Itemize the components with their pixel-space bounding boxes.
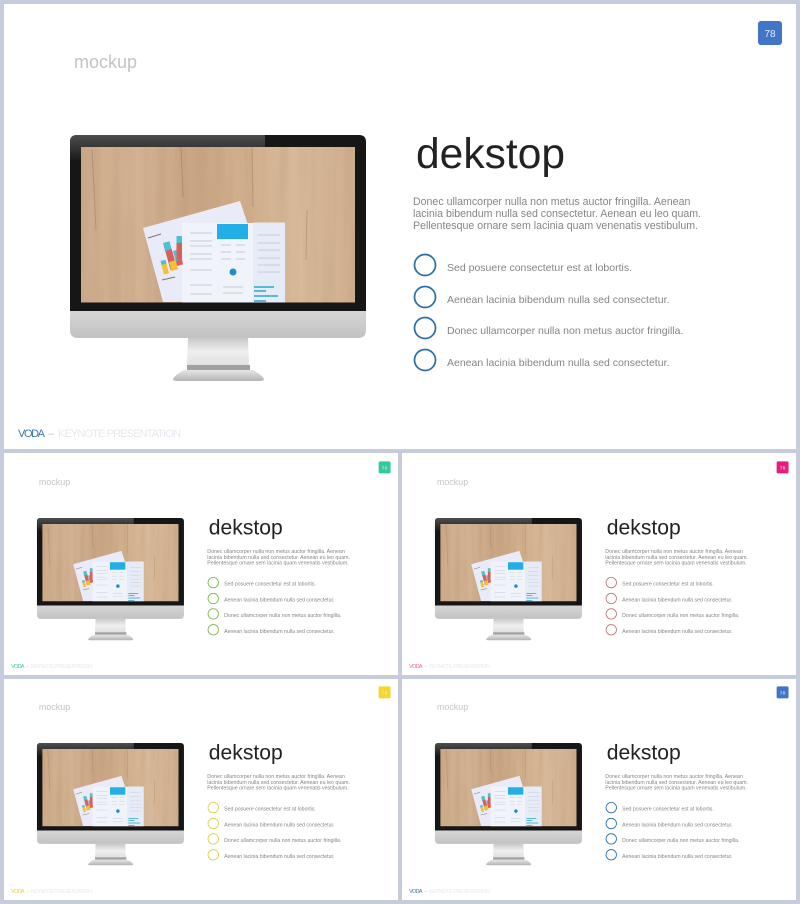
footer: – — [26, 664, 30, 670]
badge: page number — [758, 21, 782, 45]
footer: – — [48, 428, 55, 440]
illustration: desktop monitor — [435, 518, 582, 640]
list: bullet points: Aenean lacinia bibendum nulla sed consectetur. — [447, 357, 669, 369]
panel: small slide, yellow — [4, 679, 398, 900]
badge: page number: 78 — [382, 465, 388, 471]
title: dekstop: dekstop — [209, 516, 283, 539]
illustration: desktop monitor — [37, 518, 184, 640]
text block: description: Pellentesque ornare sem lacinia quam venenatis vestibulum. — [413, 220, 698, 232]
badge: page number — [777, 686, 789, 698]
footer: VODA — [409, 889, 423, 895]
illustration: desktop monitor — [70, 135, 366, 381]
list: bullet points: Sed posuere consectetur est at lobortis. — [622, 807, 714, 813]
text block: description: lacinia bibendum nulla sed consectetur. Aenean eu leo quam. — [413, 208, 701, 220]
list: bullet points — [606, 802, 739, 860]
illustration: desktop monitor — [37, 743, 184, 865]
footer: VODA — [11, 889, 25, 895]
text block: description: lacinia bibendum nulla sed consectetur. Aenean eu leo quam. — [605, 780, 748, 786]
list: bullet points: Aenean lacinia bibendum nulla sed consectetur. — [224, 822, 334, 828]
list: bullet points: Aenean lacinia bibendum nulla sed consectetur. — [622, 597, 732, 603]
list: bullet points: Aenean lacinia bibendum nulla sed consectetur. — [622, 629, 732, 635]
panel: small slide, pink — [402, 453, 796, 675]
list: bullet points: Donec ullamcorper nulla non metus auctor fringilla. — [224, 613, 341, 619]
panel: small slide, blue — [402, 679, 796, 900]
panel: main slide, blue — [4, 4, 796, 449]
text block: description: Pellentesque ornare sem lacinia quam venenatis vestibulum. — [605, 561, 747, 567]
footer: – — [424, 889, 428, 895]
list: bullet points: Sed posuere consectetur est at lobortis. — [224, 582, 316, 588]
footer: KEYNOTE PRESENTATION — [31, 889, 92, 895]
title: dekstop: dekstop — [607, 516, 681, 539]
list: bullet points — [606, 577, 739, 635]
badge: page number — [379, 686, 391, 698]
text block: description: Pellentesque ornare sem lacinia quam venenatis vestibulum. — [207, 786, 349, 792]
list: bullet points — [414, 254, 683, 370]
title: dekstop: dekstop — [416, 131, 565, 178]
text block: description: Pellentesque ornare sem lacinia quam venenatis vestibulum. — [605, 786, 747, 792]
list: bullet points: Aenean lacinia bibendum nulla sed consectetur. — [224, 629, 334, 635]
badge: page number: 78 — [382, 690, 388, 696]
list: bullet points: Donec ullamcorper nulla non metus auctor fringilla. — [622, 613, 739, 619]
list: bullet points: Sed posuere consectetur est at lobortis. — [622, 582, 714, 588]
list: bullet points: Aenean lacinia bibendum nulla sed consectetur. — [224, 854, 334, 860]
text block: description: Donec ullamcorper nulla non metus auctor fringilla. Aenean — [207, 774, 345, 780]
text block: description: Donec ullamcorper nulla non metus auctor fringilla. Aenean — [413, 196, 690, 208]
footer: KEYNOTE PRESENTATION — [429, 889, 490, 895]
list: bullet points: Sed posuere consectetur est at lobortis. — [224, 807, 316, 813]
text block: description: Pellentesque ornare sem lacinia quam venenatis vestibulum. — [207, 561, 349, 567]
title: dekstop: dekstop — [607, 741, 681, 764]
badge: page number — [777, 461, 789, 473]
list: bullet points: Aenean lacinia bibendum nulla sed consectetur. — [622, 822, 732, 828]
list: bullet points: Aenean lacinia bibendum nulla sed consectetur. — [447, 294, 669, 306]
footer: VODA — [409, 664, 423, 670]
heading: mockup: mockup — [39, 477, 70, 487]
badge: page number: 78 — [780, 465, 786, 471]
list: bullet points — [208, 802, 341, 860]
badge: page number — [379, 461, 391, 473]
list: bullet points: Sed posuere consectetur est at lobortis. — [447, 262, 632, 274]
illustration: desktop monitor — [435, 743, 582, 865]
text block: description: lacinia bibendum nulla sed consectetur. Aenean eu leo quam. — [207, 780, 350, 786]
text block: description: Donec ullamcorper nulla non metus auctor fringilla. Aenean — [605, 774, 743, 780]
footer: KEYNOTE PRESENTATION — [429, 664, 490, 670]
badge: page number: 78 — [780, 690, 786, 696]
footer: – — [424, 664, 428, 670]
list: bullet points: Donec ullamcorper nulla non metus auctor fringilla. — [622, 838, 739, 844]
footer: VODA — [11, 664, 25, 670]
text block: description: Donec ullamcorper nulla non metus auctor fringilla. Aenean — [207, 549, 345, 555]
text block: description: Donec ullamcorper nulla non metus auctor fringilla. Aenean — [605, 549, 743, 555]
footer: KEYNOTE PRESENTATION — [58, 428, 181, 440]
footer: – — [26, 889, 30, 895]
list: bullet points — [208, 577, 341, 635]
list: bullet points: Aenean lacinia bibendum nulla sed consectetur. — [622, 854, 732, 860]
panel: small slide, green — [4, 453, 398, 675]
heading: mockup: mockup — [39, 702, 70, 712]
heading: mockup: mockup — [437, 702, 468, 712]
heading: mockup: mockup — [74, 52, 137, 72]
heading: mockup: mockup — [437, 477, 468, 487]
footer: VODA — [18, 428, 46, 440]
list: bullet points: Donec ullamcorper nulla non metus auctor fringilla. — [447, 325, 683, 337]
title: dekstop: dekstop — [209, 741, 283, 764]
text block: description: lacinia bibendum nulla sed consectetur. Aenean eu leo quam. — [207, 555, 350, 561]
list: bullet points: Donec ullamcorper nulla non metus auctor fringilla. — [224, 838, 341, 844]
footer: KEYNOTE PRESENTATION — [31, 664, 92, 670]
text block: description: lacinia bibendum nulla sed consectetur. Aenean eu leo quam. — [605, 555, 748, 561]
badge: page number: 78 — [764, 29, 776, 40]
list: bullet points: Aenean lacinia bibendum nulla sed consectetur. — [224, 597, 334, 603]
